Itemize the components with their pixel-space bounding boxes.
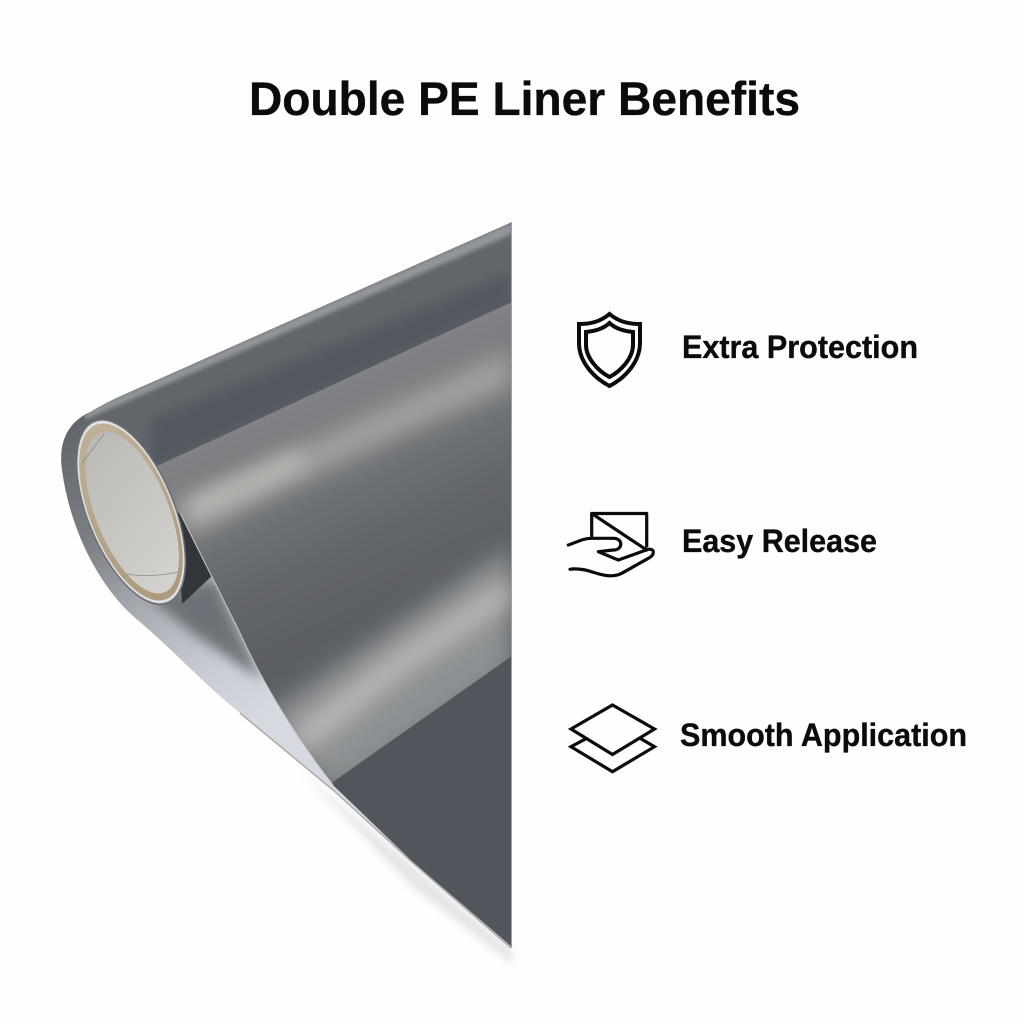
first highlight (170, 350, 512, 535)
label: Easy Release (682, 523, 877, 559)
film underside (61, 412, 511, 948)
dark gap behind core (175, 500, 213, 604)
cardboard core (53, 404, 209, 620)
vinyl film roll illustration (53, 200, 520, 970)
label: Smooth Application (680, 717, 967, 753)
top light edge (84, 222, 512, 420)
core seam lines (82, 434, 179, 576)
title: Double PE Liner Benefits (249, 72, 800, 125)
upper dark band (150, 272, 512, 470)
tan core edge (58, 409, 204, 615)
benefit: extra protection (579, 314, 918, 386)
dark lower panel (332, 657, 511, 946)
icon: shield (579, 314, 640, 386)
base colour (90, 222, 511, 946)
icon: stacked layers (571, 705, 654, 772)
right edge line (510, 222, 512, 948)
core interior (66, 419, 198, 606)
benefit: smooth application (571, 705, 967, 772)
icon: hand with sheet (568, 514, 653, 576)
shadow under the roll (150, 580, 262, 680)
label: Extra Protection (682, 329, 918, 365)
second highlight core (290, 578, 512, 750)
rim of film wrap (53, 404, 209, 620)
film edge highlight (180, 513, 333, 785)
soft floor shadow (300, 770, 512, 964)
glossy film face (84, 222, 511, 946)
benefit: easy release (568, 514, 877, 576)
floor edge (240, 713, 511, 948)
second highlight glow (265, 545, 512, 795)
graded middle zone (157, 302, 511, 782)
